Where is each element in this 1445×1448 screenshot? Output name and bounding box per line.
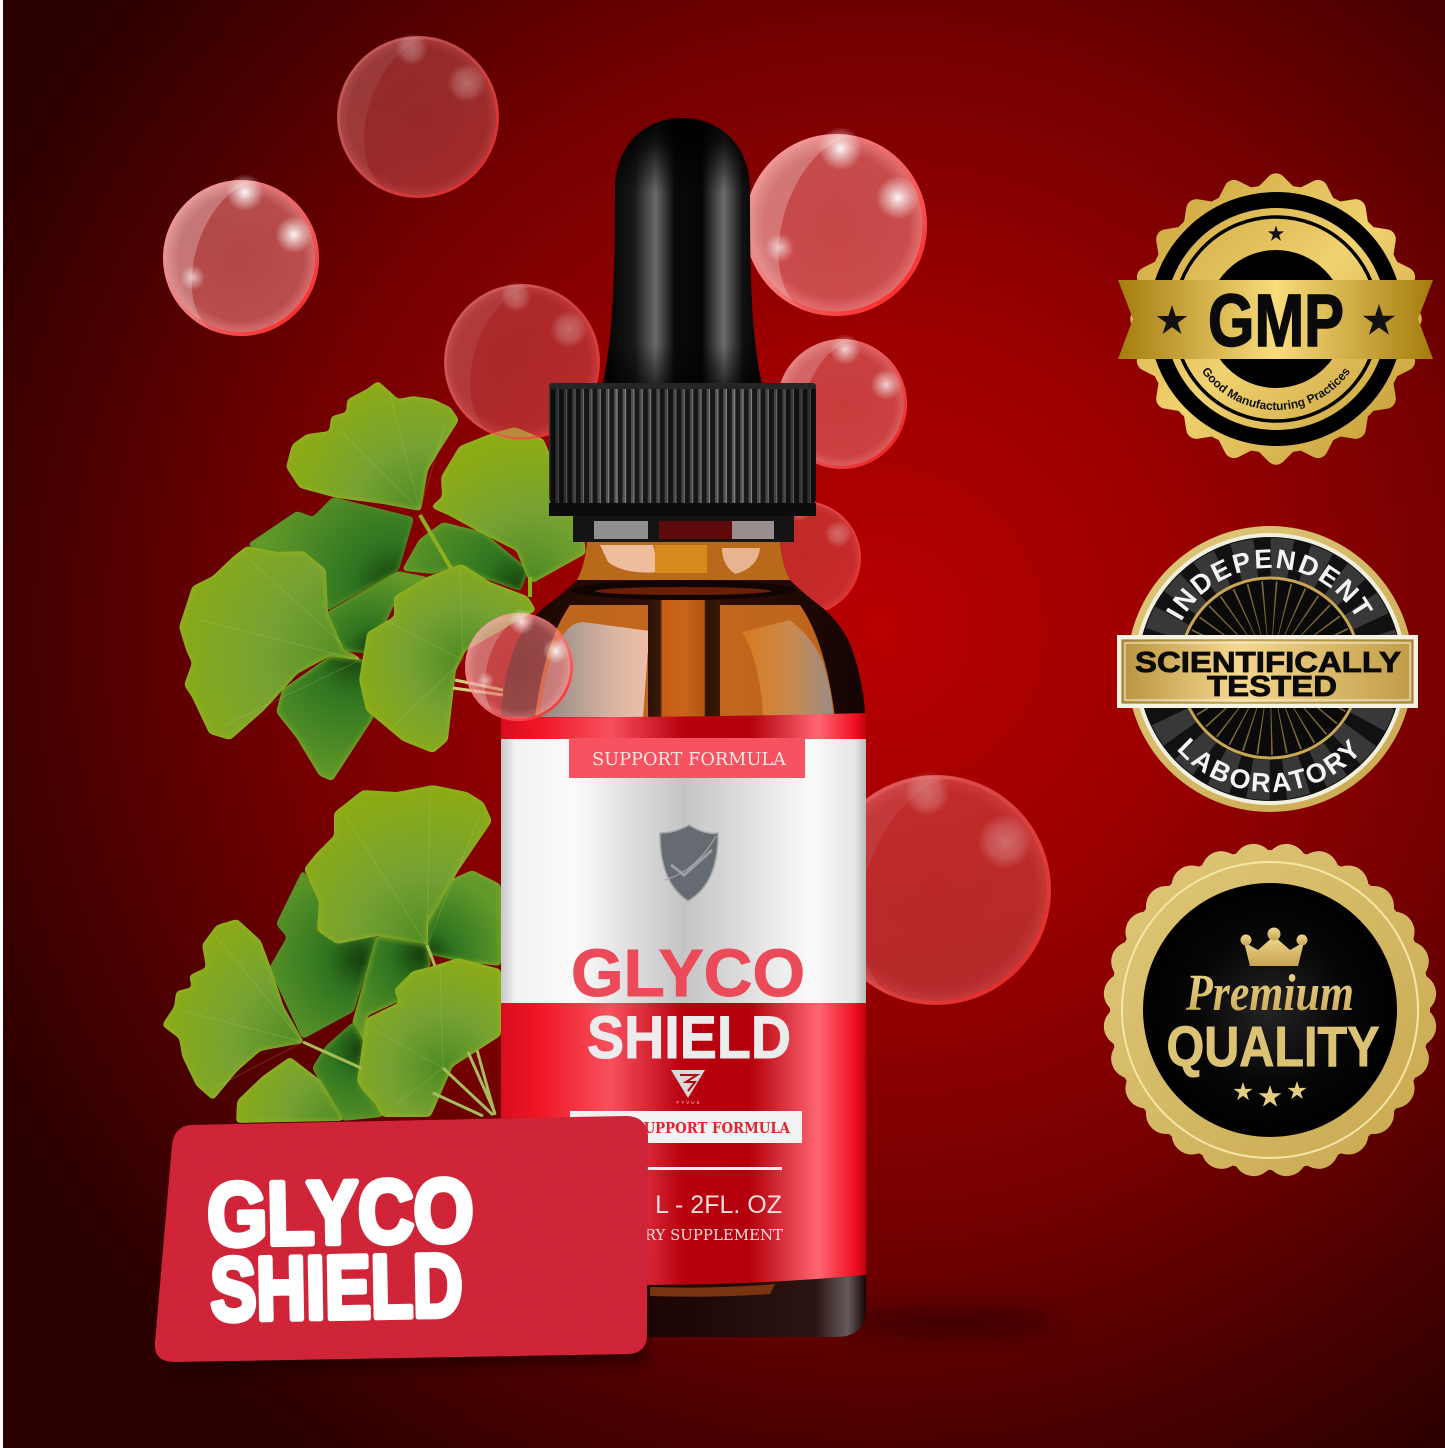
inner disc — [1180, 578, 1360, 758]
card text shield: SHIELD — [210, 1235, 463, 1339]
label brand name glyco: GLYCO — [571, 936, 805, 1011]
supplement text: DIETARY SUPPLEMENT — [596, 1226, 783, 1244]
bubble top right — [721, 110, 927, 316]
neck reflections — [600, 545, 660, 573]
red brand card — [155, 1116, 648, 1362]
badge: premium quality — [1100, 840, 1440, 1180]
ribbon star left — [1157, 305, 1187, 334]
stars — [1233, 1081, 1307, 1107]
bubble top left — [143, 160, 319, 336]
dropper tube — [648, 600, 720, 717]
lower stems — [453, 680, 503, 695]
volume text: 60ML - 2FL. OZ — [600, 1191, 782, 1219]
right reflection — [742, 620, 833, 717]
card shadow — [175, 1126, 648, 1372]
neck dark lip — [571, 580, 795, 600]
quality text: QUALITY — [1166, 1015, 1380, 1079]
large bubble right — [791, 745, 1051, 1005]
stems — [303, 945, 495, 1116]
stems — [420, 515, 530, 597]
crown — [1240, 928, 1308, 966]
shield icon — [660, 825, 718, 901]
leaf bottom left — [237, 1058, 343, 1122]
gold rays — [1226, 624, 1314, 712]
leaf front right — [360, 565, 535, 752]
red label band — [501, 713, 866, 1285]
leaf top — [305, 786, 491, 945]
brand logo: FYVUS — [676, 1100, 702, 1105]
banner text line two: TESTED — [1207, 671, 1337, 703]
front bubble over leaf — [451, 599, 573, 721]
label brand name shield: SHIELD — [587, 1004, 791, 1071]
black disc — [1143, 883, 1397, 1137]
thin ring — [1174, 217, 1378, 421]
card body — [155, 1116, 648, 1362]
curved motto: Good Manufacturing Practices — [1203, 368, 1350, 410]
banner text line one: SCIENTIFICALLY — [1135, 647, 1401, 679]
scalloped seal — [1130, 173, 1422, 465]
rubber bulb — [603, 118, 762, 384]
spokes — [1159, 558, 1381, 780]
leaf large left — [180, 547, 363, 739]
leaf lower middle — [277, 657, 373, 780]
black centre — [1207, 250, 1345, 388]
leaf left — [163, 920, 303, 1099]
top red tab — [569, 738, 805, 778]
left reflection — [540, 622, 657, 717]
badge: scientifically tested — [1117, 526, 1418, 812]
dropper bottle — [501, 118, 866, 1337]
white ring — [1134, 533, 1406, 805]
leaf bottom centre — [313, 1023, 383, 1120]
collar — [573, 515, 794, 542]
white tag — [570, 1111, 802, 1143]
brand logo — [671, 1070, 705, 1105]
black disc — [1138, 537, 1402, 801]
leaf right — [432, 428, 585, 582]
leaf top — [287, 382, 458, 510]
bubble behind shoulder — [732, 486, 861, 615]
shoulder orange glow — [535, 605, 835, 717]
thin gold ring — [1122, 862, 1418, 1158]
divider line — [595, 1167, 782, 1170]
glass body — [501, 542, 865, 1337]
leaf behind right — [427, 871, 500, 965]
ribbon star right — [1363, 304, 1395, 335]
black ring — [1157, 200, 1395, 438]
amber neck — [577, 542, 790, 580]
leaf behind middle — [248, 498, 413, 610]
white label area — [501, 739, 866, 1003]
laboratory arc text: LABORATORY — [1178, 738, 1357, 792]
leaf behind right — [403, 523, 528, 590]
leaf behind left — [270, 871, 377, 1038]
banner — [1117, 635, 1418, 708]
bubbles behind bottle — [143, 15, 1051, 1005]
card text glyco: GLYCO — [207, 1160, 474, 1264]
base amber stripe — [650, 1284, 775, 1297]
scalloped seal — [1100, 840, 1440, 1180]
white tag text: SUPPORT FORMULA — [634, 1119, 790, 1137]
gold outer ring — [1127, 526, 1413, 812]
leaf small centre — [327, 572, 428, 653]
GMP text: GMP — [1208, 279, 1344, 362]
leaf centre — [353, 937, 430, 1042]
bubble behind cap left — [424, 264, 600, 440]
independent arc text: INDEPENDENT — [1166, 549, 1374, 620]
premium text: Premium — [1185, 965, 1354, 1022]
star top — [1268, 226, 1284, 241]
bubble top centre — [316, 15, 499, 198]
bubble beside cap — [760, 322, 907, 469]
leaf front — [358, 959, 500, 1116]
ginkgo leaves upper cluster — [180, 382, 585, 780]
veins — [180, 795, 480, 1105]
top tab text: SUPPORT FORMULA — [592, 749, 787, 770]
ginkgo leaves lower cluster — [163, 786, 500, 1122]
ribbon — [1118, 280, 1433, 359]
ribbed cap — [549, 383, 816, 516]
badge: GMP — [1118, 173, 1433, 465]
bottle base — [501, 1275, 866, 1337]
floor shadow — [840, 1309, 1060, 1335]
veins — [200, 395, 463, 725]
